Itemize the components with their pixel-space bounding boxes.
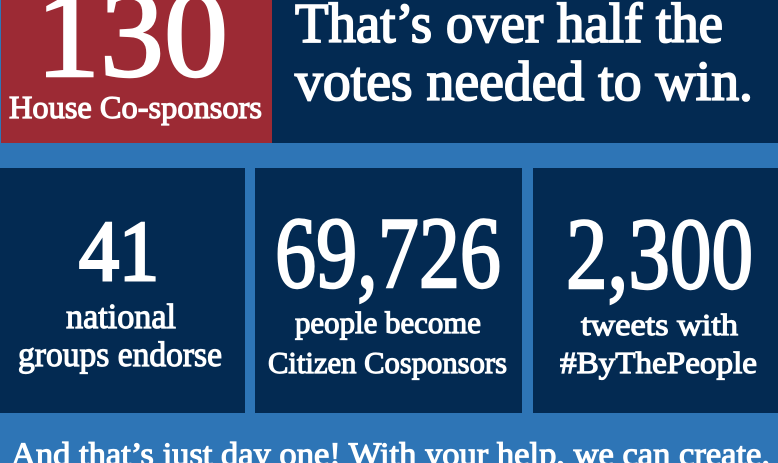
label: people become citizen cosponsors: Citizen Cosponsors [268, 345, 507, 380]
panel: votes headline [272, 0, 778, 143]
label: people become citizen cosponsors [268, 305, 507, 380]
label: House Co-sponsors: House Co-sponsors [9, 89, 262, 125]
number: 69,726: 69,726 [275, 197, 501, 310]
label: national groups endorse: national [66, 297, 176, 336]
headline text [295, 0, 753, 113]
label: tweets with hashtag [560, 307, 757, 380]
label: people become citizen cosponsors: people become [295, 305, 481, 340]
label: tweets with hashtag: #ByThePeople [560, 345, 757, 380]
panel: house co-sponsors count [1, 0, 272, 143]
label: tweets with hashtag: tweets with [581, 307, 739, 342]
panel: citizen cosponsors [255, 168, 522, 413]
label: national groups endorse: groups endorse [18, 335, 222, 374]
number: 41: 41 [79, 203, 159, 299]
headline text: votes needed to win. [295, 51, 753, 113]
label: national groups endorse [18, 297, 222, 374]
panel: national groups [0, 168, 245, 413]
panel: tweets [533, 168, 778, 413]
